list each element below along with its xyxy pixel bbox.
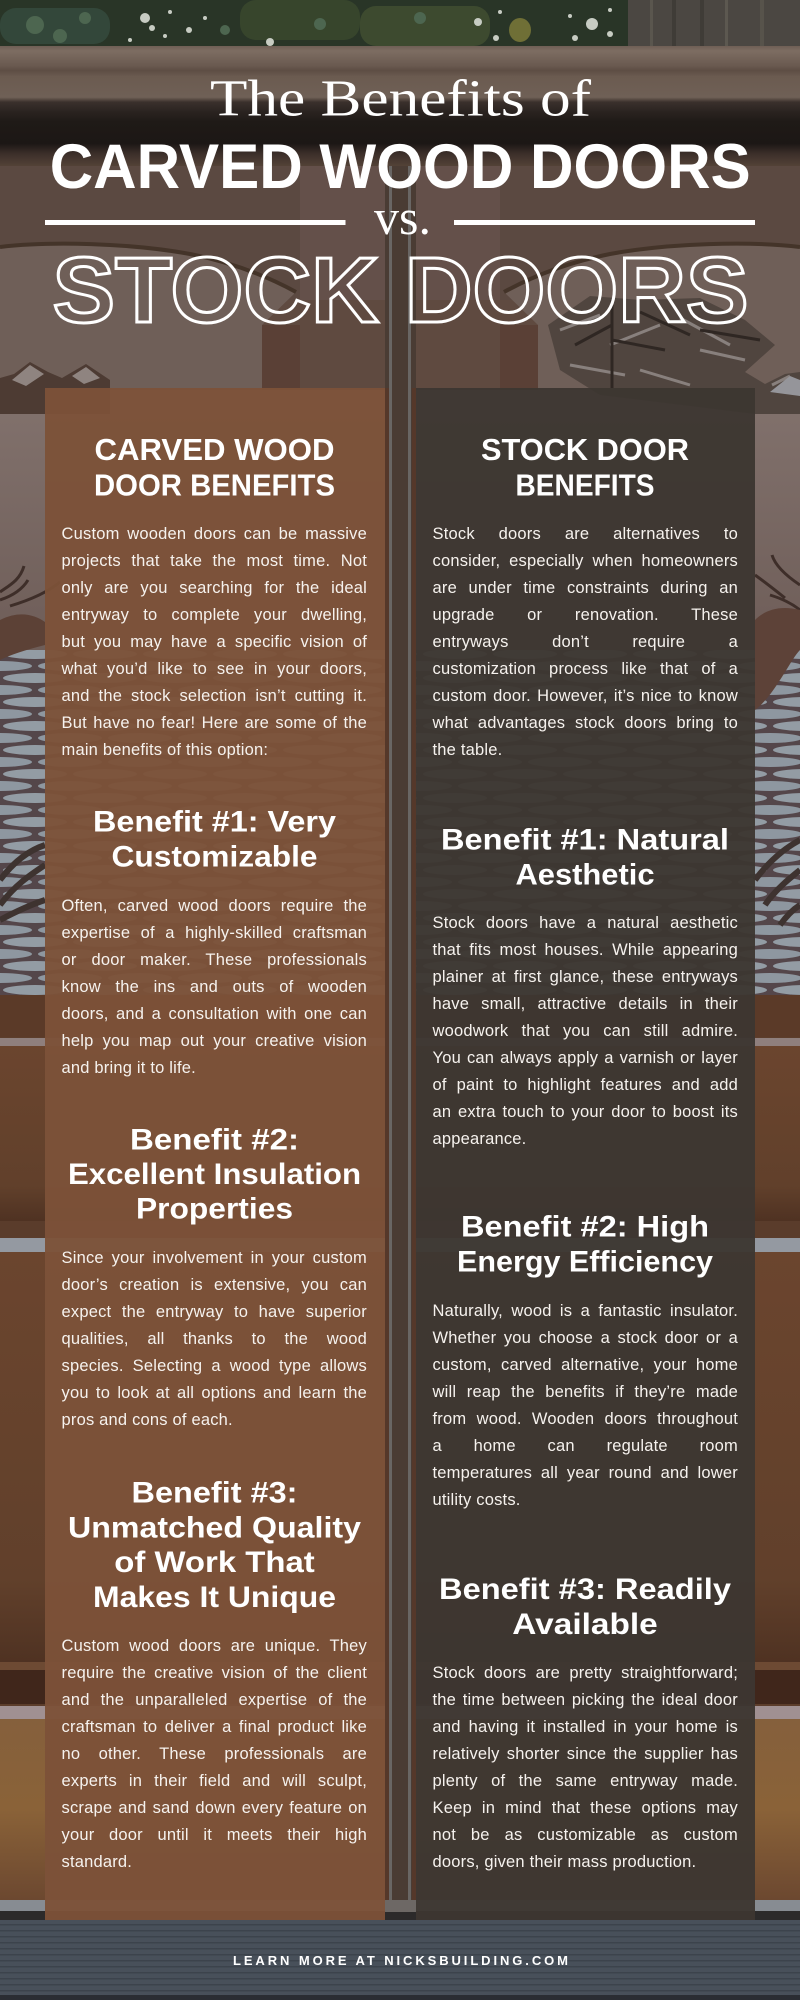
text: carved benefit 3: craftsman to deliver a final product like [62, 1718, 367, 1736]
title line: Carved Wood Doors: CARVED WOOD DOORS [50, 132, 751, 202]
heading: benefit 3 unmatched quality: Unmatched Quality [68, 1511, 361, 1544]
text: stock benefit 1: You can always apply a varnish or layer [432, 1049, 738, 1067]
text: stock benefit 1: Stock doors have a natural aesthetic [432, 914, 738, 932]
heading: benefit 2 high energy efficiency [457, 1211, 713, 1279]
text: carved intro: what you’d like to see in your doors, [62, 660, 367, 678]
heading: stock door benefits: STOCK DOOR [481, 432, 689, 467]
heading: carved wood door benefits: CARVED WOOD [94, 432, 334, 467]
text: carved benefit 1: know the ins and outs of wooden [62, 978, 367, 996]
text: stock benefit 3: the time between picking the ideal door [432, 1691, 738, 1709]
text: carved intro: and the stock selection isn’t cutting it. [62, 687, 367, 705]
text: carved intro: entryway to complete your dwelling, [62, 606, 367, 624]
text: stock benefit 2: utility costs. [432, 1491, 521, 1509]
heading: benefit 3 readily available: Available [512, 1608, 658, 1641]
heading: benefit 2 excellent insulation properties: Excellent Insulation [68, 1158, 361, 1191]
door arches [0, 244, 800, 430]
text: carved benefit 3: require the creative vision of the client [62, 1664, 367, 1682]
text: stock benefit 3: and having it installed in your home is [432, 1718, 738, 1736]
text: carved intro: main benefits of this option: [62, 741, 268, 759]
heading: stock door benefits [481, 432, 689, 503]
text: stock benefit 1: woodwork that you can still admire. [432, 1022, 738, 1040]
text: stock benefit 2: from wood. Wooden doors throughout [432, 1410, 738, 1428]
text: carved intro: Custom wooden doors can be massive [62, 525, 367, 543]
text: carved intro [62, 525, 367, 759]
divider with vs.: vs. [374, 189, 431, 245]
heading: benefit 1 natural aesthetic: Benefit #1: Natural [441, 823, 729, 856]
heading: benefit 3 readily available: Benefit #3: Readily [439, 1573, 731, 1606]
text: stock benefit 1: an extra touch to your door to boost its [432, 1103, 738, 1121]
heading: benefit 2 excellent insulation properties: Benefit #2: [130, 1123, 299, 1156]
text: stock intro: what advantages stock doors bring to [432, 714, 738, 732]
heading: benefit 3 readily available [439, 1573, 731, 1641]
text: stock benefit 3: relatively shorter since the supplier has [432, 1745, 738, 1763]
text: stock benefit 2: a home can regulate room [432, 1437, 738, 1455]
text: carved intro: but you may have a specific vision of [62, 633, 367, 651]
text: stock intro: Stock doors are alternatives to [432, 525, 738, 543]
heading: benefit 3 unmatched quality: of Work That [114, 1546, 315, 1579]
text: carved benefit 1 [62, 897, 367, 1077]
heading: carved wood door benefits: DOOR BENEFITS [94, 468, 335, 503]
text: stock benefit 1: plainer at first glance, these entryways [432, 968, 738, 986]
text: carved benefit 1: and bring it to life. [62, 1059, 196, 1077]
text: stock benefit 1: of paint to highlight features and add [432, 1076, 738, 1094]
foliage strip [0, 0, 800, 48]
heading: carved wood door benefits [94, 432, 335, 503]
text: stock intro: custom door. However, it’s nice to know [432, 687, 738, 705]
heading: benefit 1 very customizable: Benefit #1: Very [93, 806, 336, 839]
title line: Stock Doors outlined: STOCK DOORS [52, 238, 748, 340]
title line: The Benefits of: The Benefits of [210, 70, 592, 128]
text: carved benefit 3 [62, 1637, 367, 1871]
heading: benefit 3 unmatched quality: Benefit #3: [132, 1476, 298, 1509]
text: carved intro: projects that take the most time. Not [62, 552, 367, 570]
text: carved intro: But have no fear! Here are some of the [62, 714, 367, 732]
text: carved benefit 2: door’s creation is extensive, you can [62, 1276, 367, 1294]
text: carved benefit 2: species. Selecting a wood type allows [62, 1357, 367, 1375]
text: carved benefit 2: pros and cons of each. [62, 1411, 233, 1429]
lintel and dark band [0, 46, 800, 168]
divider with vs. [45, 189, 755, 245]
text: stock intro: entryways don’t require a [432, 633, 738, 651]
footer: learn more link text: LEARN MORE AT NICKSBUILDING.COM [233, 1953, 568, 1968]
text: carved benefit 3: your door until it meets their high [62, 1826, 367, 1844]
text: carved benefit 2: you to look at all options and learn the [62, 1384, 367, 1402]
text: stock benefit 2 [432, 1302, 738, 1509]
text: carved benefit 1: Often, carved wood doors require the [62, 897, 367, 915]
text: stock intro [432, 525, 738, 759]
text: stock benefit 1: have small, attractive details in their [432, 995, 738, 1013]
centre door column [385, 166, 416, 1912]
carved mountains and tree [0, 296, 800, 414]
floor [0, 1920, 800, 2000]
heading: benefit 1 very customizable: Customizable [112, 841, 318, 874]
heading: benefit 2 high energy efficiency: Benefit #2: High [461, 1211, 709, 1244]
text: stock intro: are under time constraints during an [432, 579, 738, 597]
text: stock benefit 2: Naturally, wood is a fantastic insulator. [432, 1302, 738, 1320]
text: carved benefit 1: or door maker. These professionals [62, 951, 367, 969]
text: carved benefit 2: expect the entryway to have superior [62, 1303, 367, 1321]
heading: benefit 1 natural aesthetic: Aesthetic [516, 858, 654, 892]
heading: benefit 2 excellent insulation properties [68, 1123, 361, 1226]
text: carved benefit 3: experts in their field and will sculpt, [62, 1772, 367, 1790]
text: stock benefit 3: Keep in mind that these options may [432, 1799, 738, 1817]
heading: benefit 2 high energy efficiency: Energy Efficiency [457, 1246, 713, 1279]
side panels [0, 390, 800, 1920]
text: stock benefit 3 [432, 1664, 738, 1871]
text: carved benefit 3: no other. These professionals are [62, 1745, 367, 1763]
text: stock benefit 2: custom, carved alternative, your home [432, 1356, 738, 1374]
heading: benefit 1 very customizable [93, 806, 336, 874]
heading: benefit 2 excellent insulation properties: Properties [136, 1193, 293, 1226]
text: carved benefit 1: help you map out your creative vision [62, 1032, 367, 1050]
text: stock intro: upgrade or renovation. These [432, 606, 738, 624]
text: stock benefit 3: plenty of the same entryway made. [432, 1772, 738, 1790]
heading: benefit 1 natural aesthetic [441, 823, 729, 892]
text: carved benefit 3: scrape and sand down every feature on [62, 1799, 367, 1817]
heading: stock door benefits: BENEFITS [516, 468, 654, 503]
panel: stock door benefits [416, 388, 755, 1920]
text: carved benefit 2: qualities, all thanks to the wood [62, 1330, 367, 1348]
text: stock benefit 1: appearance. [432, 1130, 526, 1148]
text: stock benefit 3: not be as customizable as custom [432, 1826, 738, 1844]
text: stock benefit 2: Whether you choose a stock door or a [432, 1329, 738, 1347]
text: carved intro: only are you searching for the ideal [62, 579, 367, 597]
text: stock intro: customization process like that of a [432, 660, 738, 678]
text: stock benefit 1 [432, 914, 738, 1148]
heading: benefit 3 unmatched quality: Makes It Unique [93, 1581, 336, 1614]
text: stock benefit 3: Stock doors are pretty straightforward; [432, 1664, 738, 1682]
text: carved benefit 3: Custom wood doors are unique. They [62, 1637, 367, 1655]
text: carved benefit 2 [62, 1249, 367, 1429]
title [45, 70, 755, 340]
text: stock benefit 3: doors, given their mass production. [432, 1853, 696, 1871]
panel: carved wood door benefits [45, 388, 385, 1920]
text: stock benefit 2: temperatures all year round and lower [432, 1464, 738, 1482]
text: carved benefit 3: standard. [62, 1853, 132, 1871]
text: stock intro: consider, especially when homeowners [432, 552, 738, 570]
text: stock benefit 2: will reap the benefits if they’re made [432, 1383, 738, 1401]
heading: benefit 3 unmatched quality [68, 1476, 361, 1614]
text: stock benefit 1: that fits most houses. While appearing [432, 941, 738, 959]
text: carved benefit 1: doors, and a consultation with one can [62, 1005, 367, 1023]
carved deer [0, 555, 800, 925]
text: carved benefit 3: and the unparalleled expertise of the [62, 1691, 367, 1709]
text: carved benefit 2: Since your involvement in your custom [62, 1249, 367, 1267]
text: carved benefit 1: expertise of a highly-skilled craftsman [62, 924, 367, 942]
upper door wood [0, 166, 800, 390]
text: stock intro: the table. [432, 741, 502, 759]
